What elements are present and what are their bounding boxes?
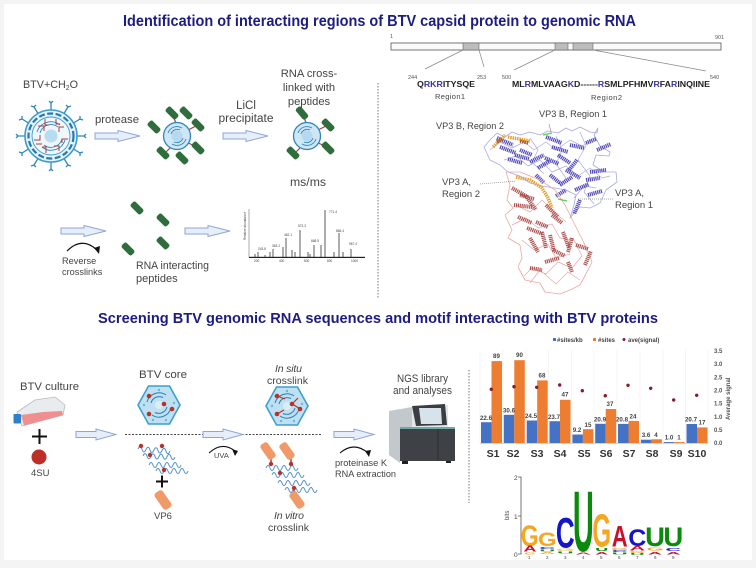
label: residue numbers: 1 [390,34,393,40]
right axis: 1.5 [714,402,723,408]
right axis: 0.5 [714,428,723,434]
label: residue numbers: 500 [502,75,511,81]
data labels: 20.8 [616,416,629,424]
arrow: to NGS [334,429,374,440]
logo letters: U [663,521,683,552]
logo letters: U [539,549,555,552]
label: NGS library and analyses: and analyses [393,385,452,397]
structure: VP3 A chain (red) [505,172,592,294]
label: VP3 A, Region 2: Region 2 [442,189,480,200]
logo letters: U [557,551,574,554]
chart: mass spectrum: Relative abundance [243,212,247,240]
data labels: 22.6 [480,415,493,422]
chart: mass spectrum: 600 [304,259,310,263]
category axis: S1 [487,448,500,460]
chart: mass spectrum: 967.4 [349,242,357,246]
icon: VP6 protein [153,489,173,511]
logo position numbers: 3 [564,555,567,560]
logo letters: G [592,505,611,557]
label: LiCl precipitate: precipitate [218,113,274,125]
logo letters: U [630,553,645,556]
data labels: 17 [699,420,706,426]
icon: RNA strands with 4SU [138,444,188,474]
logo position numbers: 7 [636,555,639,560]
chart: mass spectrum [243,209,365,263]
panel: VP3 protein structure [436,109,653,294]
label: Reverse crosslinks [62,256,103,277]
logo position numbers: 2 [546,555,549,560]
logo letters: C [612,550,628,553]
label: LiCl precipitate: LiCl [236,100,256,112]
logo letters: G [630,550,645,554]
label: RNA interacting peptides: RNA interacting [136,260,209,272]
label: proteinase K RNA extraction: proteinase K [335,458,388,469]
icon: curved arrow UVA [209,446,238,456]
label: In situ crosslink [267,363,309,387]
icon: in situ crosslinked core [266,387,308,425]
right axis: 3.5 [714,349,723,355]
logo letters: A [524,544,536,553]
structure: orange region 2 highlights [493,135,552,208]
data labels: 37 [607,401,614,408]
label: UVA: UVA [214,451,229,460]
logo letters: G [538,528,557,550]
chart: mass spectrum: 400 [279,259,285,263]
legend: #sites [598,338,616,344]
panel: cross-linking workflow [16,68,365,285]
logo letters: C [539,546,555,550]
icon: plus sign [32,429,47,444]
logo position numbers: 6 [618,555,621,560]
points: average signal [490,383,698,402]
icon: plus sign [156,476,168,488]
icon: intact BTV virus particle [16,101,86,171]
logo letters: U [573,473,594,568]
label: NGS library and analyses: NGS library [397,373,448,385]
logo letters: A [666,551,681,555]
data labels: 15 [585,422,592,429]
label: BTV+CH2O: BTV+CH [23,79,67,91]
chart: mass spectrum: 1000 [351,259,358,263]
icon: free peptides [121,201,170,256]
right axis: Average signal [726,377,732,420]
logo letters: A [629,545,646,552]
logo letters: U [595,547,608,552]
right axis: 2.5 [714,376,723,382]
logo position numbers: 8 [654,555,657,560]
right axis: 2.0 [714,388,723,394]
text: region 1 sequence: QRKRITYSQE [417,80,476,89]
label: BTV core: BTV core [139,369,187,381]
category axis: S9 [670,448,683,460]
legend [553,338,659,344]
chart: mass spectrum: 573.3 [298,224,306,228]
right axis [714,349,732,447]
label: RNA interacting peptides [136,260,209,285]
chart: mass spectrum: 200 [254,259,260,263]
panel: RNA screening workflow [14,363,455,534]
logo axis: 1 [514,514,518,521]
logo letters: A [575,552,591,555]
logo position numbers: 9 [672,555,675,560]
title: identification of interacting regions: Identification of interacting regions of BTV capsid protein to genomic RNA [123,13,636,30]
right axis: 1.0 [714,415,723,421]
logo axis: bits [505,511,511,520]
arrow: protease step [95,130,140,142]
logo letters: G [521,519,539,553]
logo letters: C [628,525,647,552]
right axis: 0.0 [714,441,723,447]
label: ms/ms: ms/ms [290,175,326,189]
chart: mass spectrum: 771.4 [329,210,337,214]
logo letters: G [524,552,536,555]
diagram: VP3 sequence bar [391,43,721,71]
label: VP3 B, Region 2: VP3 B, Region 2 [436,121,504,132]
data labels: 47 [562,392,569,398]
logo letters: A [595,551,609,555]
label: BTV culture: BTV culture [20,381,79,393]
data labels: 23.7 [548,414,561,421]
icon: digested particle with peptides [147,106,205,165]
logo letters: A [612,519,628,554]
arrow: reverse crosslinks step [61,226,106,236]
logo position numbers [528,555,675,560]
icon: culture flask [14,397,65,426]
chart: mass spectrum: 668.5 [311,239,319,243]
logo letters: U [645,521,665,552]
category axis: S6 [600,448,613,460]
data labels: 20.9 [594,416,607,424]
arrow: UVA step [203,429,243,440]
legend: ave(signal) [628,338,659,344]
label: BTV+CH2O: 2 [66,85,70,92]
data labels: 24 [630,414,637,420]
chart: mass spectrum: 363.2 [272,244,280,248]
category axis [487,448,706,460]
category axis: S7 [623,448,636,460]
label: protease: protease [95,114,139,126]
label: BTV+CH2O: O [70,79,78,91]
icon: curved arrow reverse crosslinks [67,243,100,254]
label: VP3 A, Region 1 [578,188,653,211]
logo letters: A [648,551,663,555]
arrow: to mass spectrum [185,226,230,236]
label: proteinase K RNA extraction [335,458,396,480]
data labels: 90 [516,352,523,359]
logo letters [521,473,683,568]
logo axis: 0 [514,552,518,559]
icon: 4SU red dot [32,450,46,464]
structure: VP3 B chain (blue) [484,127,617,218]
logo letters: C [556,509,575,557]
panel: protein domain map [390,34,724,102]
icon: curved arrow proteinase K [340,447,371,457]
data labels: 89 [493,353,500,360]
logo position numbers: 4 [582,555,585,560]
data labels: 3.6 [642,432,651,439]
data labels: 1.0 [665,434,674,442]
arrow: LiCl step [223,130,268,142]
chart: sequence logo motif [505,473,683,568]
label: RNA cross-linked with peptides: RNA cross- [281,68,338,80]
text: region 2 sequence: MLRMLVAAG KD------ RSMLPFHMV RFARINQIINE [512,80,711,89]
data labels: 1 [677,434,681,442]
logo letters: A [539,552,555,555]
label: Reverse crosslinks: Reverse [62,256,96,266]
label: LiCl precipitate [218,100,274,125]
logo letters: U [612,552,628,555]
label: In vitro crosslink: In vitro [274,510,304,522]
category axis: S3 [531,448,544,460]
bars: #sites [492,360,708,443]
label: In situ crosslink: In situ [275,363,302,375]
label: Region2: Region2 [591,93,622,102]
logo letters: G [556,548,574,552]
label: RNA cross-linked with peptides: peptides [288,96,331,108]
label: Reverse crosslinks: crosslinks [62,267,103,277]
label: Region1: Region1 [435,92,465,101]
label: VP3 B, Region 1: VP3 B, Region 1 [539,109,607,120]
data labels: 4 [654,432,658,439]
label: VP6: VP6 [154,511,172,522]
bars: #sites/kb [481,415,697,443]
logo axis [505,475,521,559]
data labels: 9.2 [573,427,582,434]
data labels: 20.7 [685,416,698,424]
data labels: 30.6 [503,408,516,414]
label: residue numbers [390,34,724,81]
chart: mass spectrum: 866.4 [336,229,344,233]
label: VP3 A, Region 1: VP3 A, [615,188,644,199]
label: VP3 A, Region 2 [442,177,516,200]
category axis: S5 [578,448,591,460]
right axis: 3.0 [714,362,723,368]
label: In vitro crosslink: crosslink [268,522,310,534]
label: 4SU: 4SU [31,468,50,479]
chart: mass spectrum: 800 [327,259,333,263]
label: VP3 A, Region 2: VP3 A, [442,177,471,188]
label: RNA interacting peptides: peptides [136,273,178,285]
logo position numbers: 1 [528,555,531,560]
logo letters: G [611,547,628,551]
label: NGS library and analyses [393,373,452,397]
structure: green region 1 highlights [543,133,567,201]
chart: mass spectrum: 243.8 [258,247,266,251]
logo axis: 2 [514,475,518,482]
label: residue numbers: 244 [408,75,417,81]
icon: in vitro crosslinked RNA and VP6 [259,441,317,510]
category axis: S2 [507,448,520,460]
title: screening BTV genomic RNA: Screening BTV genomic RNA sequences and motif interacting with BTV proteins [98,310,658,327]
logo letters: C [665,547,682,552]
logo letters: G [646,547,664,552]
icon: RNA cross-linked particle [286,105,335,160]
label: residue numbers: 253 [477,75,486,81]
label: VP3 A, Region 1: Region 1 [615,200,653,211]
data labels [480,352,706,442]
label: residue numbers: 901 [715,35,724,41]
category axis: S10 [688,448,706,460]
label: RNA cross-linked with peptides: linked with [283,82,335,94]
chart: mass spectrum: 462.1 [284,233,292,237]
logo position numbers: 5 [600,555,603,560]
legend: #sites/kb [557,338,583,344]
label: In vitro crosslink [268,510,310,534]
icon: BTV core hexagon [138,386,180,424]
label: residue numbers: 540 [710,75,719,81]
category axis: S8 [646,448,659,460]
category axis: S4 [554,448,567,460]
data labels: 24.5 [525,413,538,420]
label: RNA cross-linked with peptides [281,68,338,108]
chart: sites per segment bar chart [480,338,732,460]
label: proteinase K RNA extraction: RNA extraction [335,469,396,480]
data labels: 68 [539,372,546,380]
label: In situ crosslink: crosslink [267,375,309,387]
icon: sequencing machine [389,404,455,464]
arrow: to BTV core [76,429,116,440]
